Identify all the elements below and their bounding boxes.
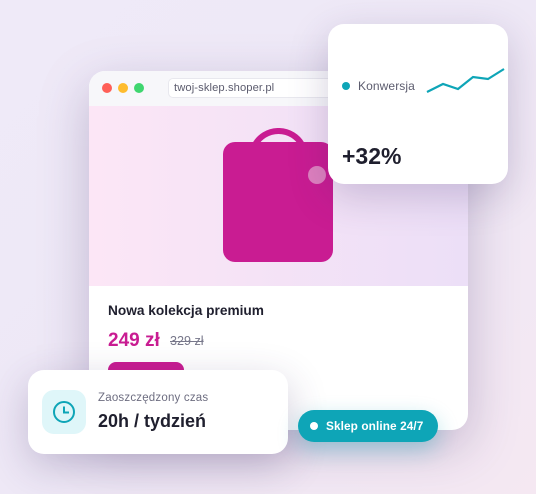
product title: Nowa kolekcja premium <box>108 303 264 318</box>
legend label: Konwersja <box>358 79 415 93</box>
card: time saved <box>28 370 288 454</box>
badge text: Sklep online 24/7 <box>326 419 423 433</box>
badge: online store <box>298 410 438 442</box>
time saved value: 20h / tydzień <box>98 411 206 431</box>
card: conversion <box>328 24 508 184</box>
product hero image area <box>89 106 468 286</box>
time saved label: Zaoszczędzony czas <box>98 392 208 404</box>
address bar: twoj-sklep.shoper.pl <box>174 82 274 94</box>
browser toolbar <box>89 71 468 106</box>
sparkline chart <box>426 68 504 93</box>
icon: green window dot <box>134 83 144 93</box>
panel: browser window <box>89 71 468 430</box>
icon: legend dot <box>342 82 350 90</box>
icon: shopping bag <box>223 128 333 262</box>
icon: red window dot <box>102 83 112 93</box>
icon: yellow window dot <box>118 83 128 93</box>
icon: clock <box>42 390 86 434</box>
address bar <box>168 78 408 98</box>
current price: 249 zł <box>108 330 160 351</box>
buy button <box>108 362 184 396</box>
conversion value: +32% <box>342 143 401 169</box>
icon: white dot <box>310 422 318 430</box>
old price: 329 zł <box>170 334 204 348</box>
